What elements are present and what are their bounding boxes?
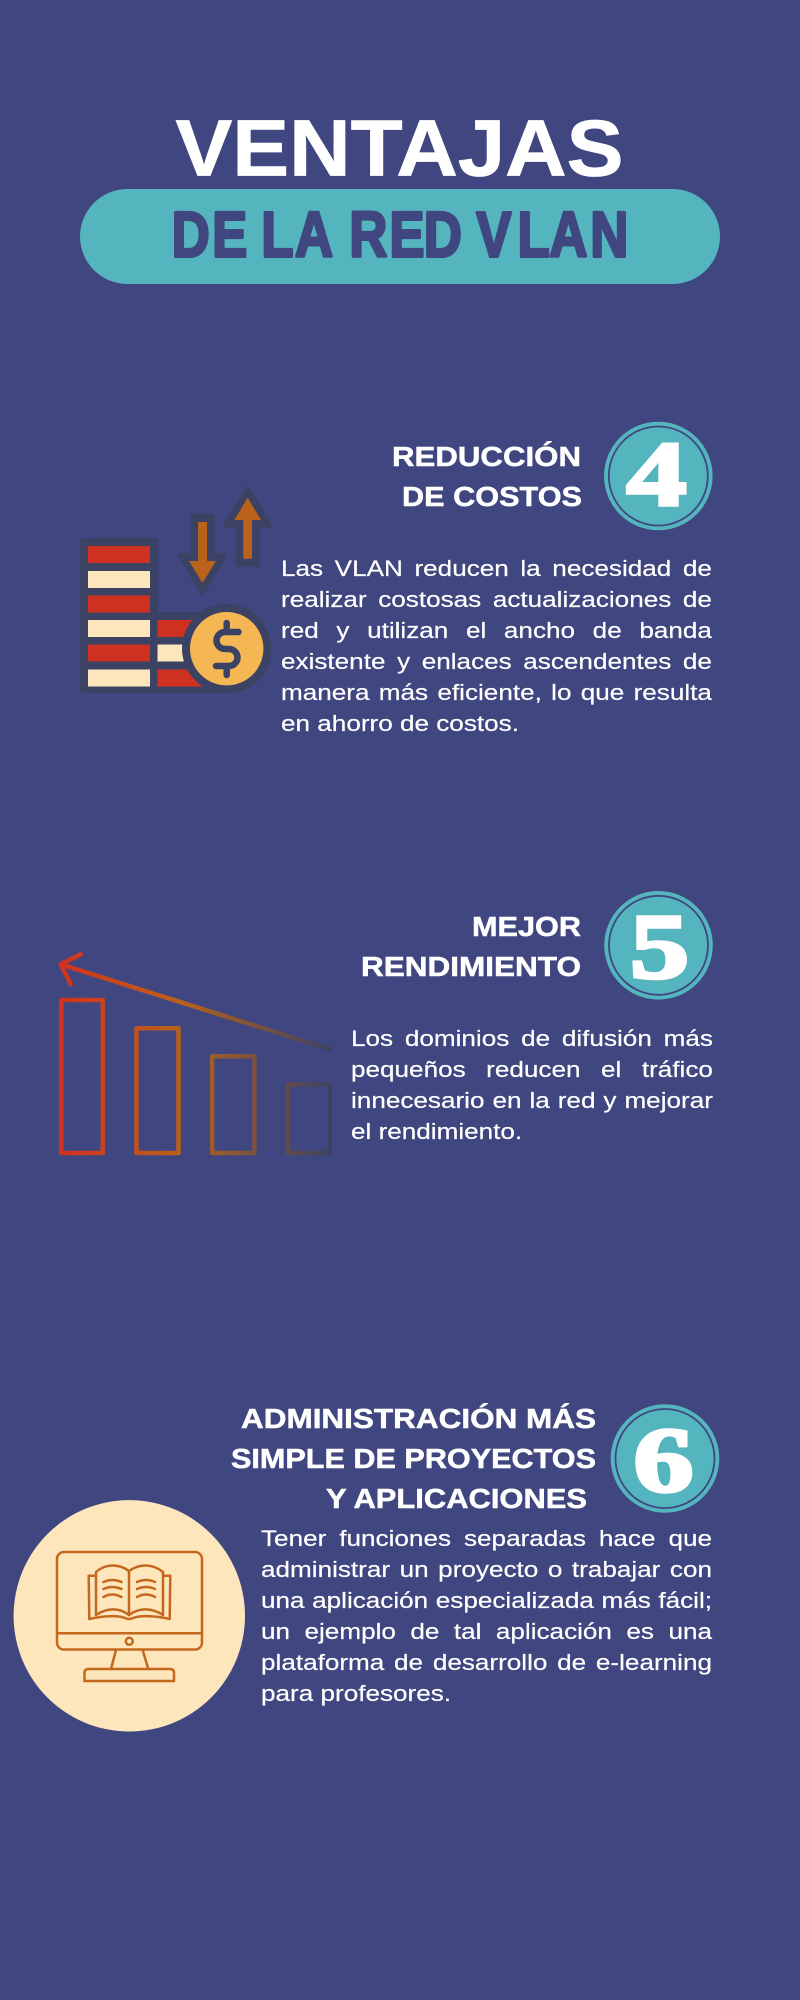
- subtitle pill background: [80, 189, 720, 284]
- body text: administración más simple: plataforma de desarrollo de e-learning: [261, 1650, 712, 1675]
- body text: reducción de costos: manera más eficiente, lo que resulta: [281, 680, 712, 705]
- number badge 6: 6: [634, 1409, 694, 1511]
- chart: descending bars with arrow: [61, 954, 330, 1153]
- body text: mejor rendimiento: [351, 1026, 713, 1144]
- icon: monitor with open book: [14, 1500, 245, 1732]
- body text: administración más simple: para profesores.: [261, 1681, 451, 1706]
- body text: administración más simple: un ejemplo de tal aplicación es una: [261, 1619, 712, 1644]
- body text: mejor rendimiento: el rendimiento.: [351, 1119, 522, 1144]
- body text: reducción de costos: red y utilizan el ancho de banda: [281, 618, 712, 643]
- body text: reducción de costos: Las VLAN reducen la necesidad de: [281, 556, 712, 581]
- number badge 4: [604, 422, 713, 530]
- heading: administración más simple de proyectos y aplicaciones: ADMINISTRACIÓN MÁS: [241, 1403, 596, 1434]
- heading: administración más simple de proyectos y aplicaciones: Y APLICACIONES: [326, 1483, 587, 1514]
- body text: mejor rendimiento: Los dominios de difusión más: [351, 1026, 713, 1051]
- number badge 5: 5: [630, 896, 689, 998]
- number badge 5: [604, 891, 713, 1000]
- body text: reducción de costos: realizar costosas actualizaciones de: [281, 587, 712, 612]
- body text: administración más simple: [261, 1526, 712, 1706]
- heading: administración más simple de proyectos y aplicaciones: [231, 1403, 596, 1514]
- heading: mejor rendimiento: MEJOR: [472, 911, 581, 942]
- heading: administración más simple de proyectos y aplicaciones: SIMPLE DE PROYECTOS: [231, 1443, 596, 1474]
- icon: coins with arrows: [80, 488, 271, 693]
- body text: reducción de costos: en ahorro de costos.: [281, 711, 519, 736]
- panel: mejor rendimiento: [58, 891, 713, 1156]
- heading: reducción de costos: REDUCCIÓN: [392, 441, 581, 472]
- heading: mejor rendimiento: [361, 911, 581, 982]
- body text: reducción de costos: [281, 556, 712, 736]
- body text: reducción de costos: existente y enlaces ascendentes de: [281, 649, 712, 674]
- number badge 4: 4: [626, 423, 686, 525]
- number badge 6: [611, 1404, 719, 1513]
- body text: mejor rendimiento: innecesario en la red y mejorar: [351, 1088, 713, 1113]
- body text: administración más simple: una aplicación especializada más fácil;: [261, 1588, 712, 1613]
- title: VENTAJAS: VENTAJAS: [176, 104, 624, 192]
- heading: reducción de costos: DE COSTOS: [402, 481, 582, 512]
- heading: reducción de costos: [392, 441, 582, 512]
- body text: administración más simple: administrar un proyecto o trabajar con: [261, 1557, 712, 1582]
- panel: reducción de costos: [80, 422, 713, 736]
- heading: mejor rendimiento: RENDIMIENTO: [361, 951, 581, 982]
- body text: mejor rendimiento: pequeños reducen el tráfico: [351, 1057, 713, 1082]
- header: title block: [80, 104, 720, 284]
- panel: administración más simple: [14, 1403, 720, 1732]
- body text: administración más simple: Tener funciones separadas hace que: [261, 1526, 712, 1551]
- subtitle: DE LA RED VLAN: DE LA RED VLAN: [172, 200, 628, 271]
